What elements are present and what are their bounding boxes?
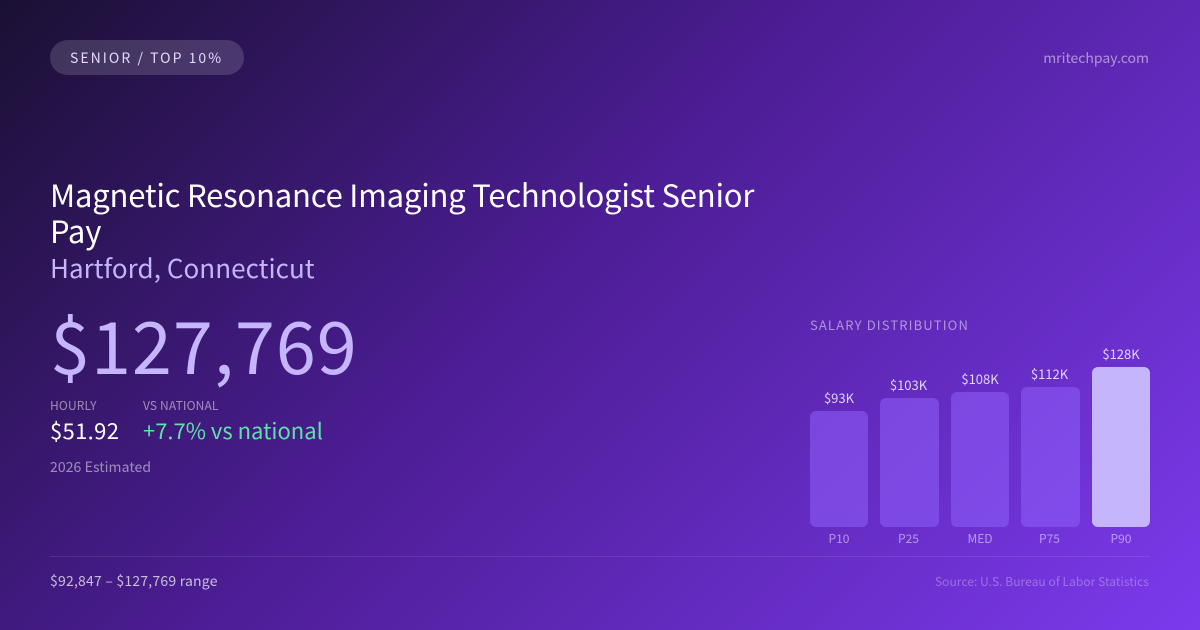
vs national label: VS NATIONAL bbox=[143, 397, 219, 414]
stat: vs national bbox=[143, 397, 323, 446]
estimate note: 2026 Estimated bbox=[50, 457, 151, 477]
bar P10 bbox=[810, 411, 868, 527]
label P75: P75 bbox=[1039, 530, 1060, 547]
bar P75 bbox=[1021, 387, 1080, 527]
chart heading: SALARY DISTRIBUTION bbox=[810, 315, 969, 334]
hourly label: HOURLY bbox=[50, 397, 97, 414]
value P25: $103K bbox=[890, 375, 927, 394]
label MED: MED bbox=[967, 530, 993, 547]
source: Source: U.S. Bureau of Labor Statistics bbox=[935, 573, 1149, 590]
title: Magnetic Resonance Imaging Technologist Senior bbox=[50, 171, 754, 216]
label P90: P90 bbox=[1111, 530, 1131, 547]
chart: salary distribution bbox=[810, 315, 1150, 547]
value P75: $112K bbox=[1031, 364, 1068, 383]
hourly value: $51.92 bbox=[50, 414, 119, 446]
bar P90 bbox=[1092, 367, 1150, 527]
bar P25 bbox=[880, 398, 939, 527]
bar MED bbox=[951, 392, 1009, 527]
salary range: $92,847 – $127,769 range bbox=[50, 571, 218, 591]
badge: senior / top 10% bbox=[50, 40, 244, 75]
value P90: $128K bbox=[1102, 344, 1140, 363]
value MED: $108K bbox=[961, 369, 999, 388]
label P25: P25 bbox=[898, 530, 919, 547]
title bbox=[50, 171, 754, 252]
vs national value: +7.7% vs national bbox=[143, 414, 323, 446]
site name: mritechpay.com bbox=[1043, 48, 1149, 68]
location subtitle: Hartford, Connecticut bbox=[50, 249, 315, 286]
stat: hourly bbox=[50, 397, 119, 446]
label P10: P10 bbox=[829, 530, 849, 547]
badge: senior / top 10%: SENIOR / TOP 10% bbox=[70, 48, 223, 68]
title: Pay bbox=[50, 207, 101, 252]
value P10: $93K bbox=[824, 388, 854, 407]
main salary figure: $127,769 bbox=[50, 290, 358, 395]
